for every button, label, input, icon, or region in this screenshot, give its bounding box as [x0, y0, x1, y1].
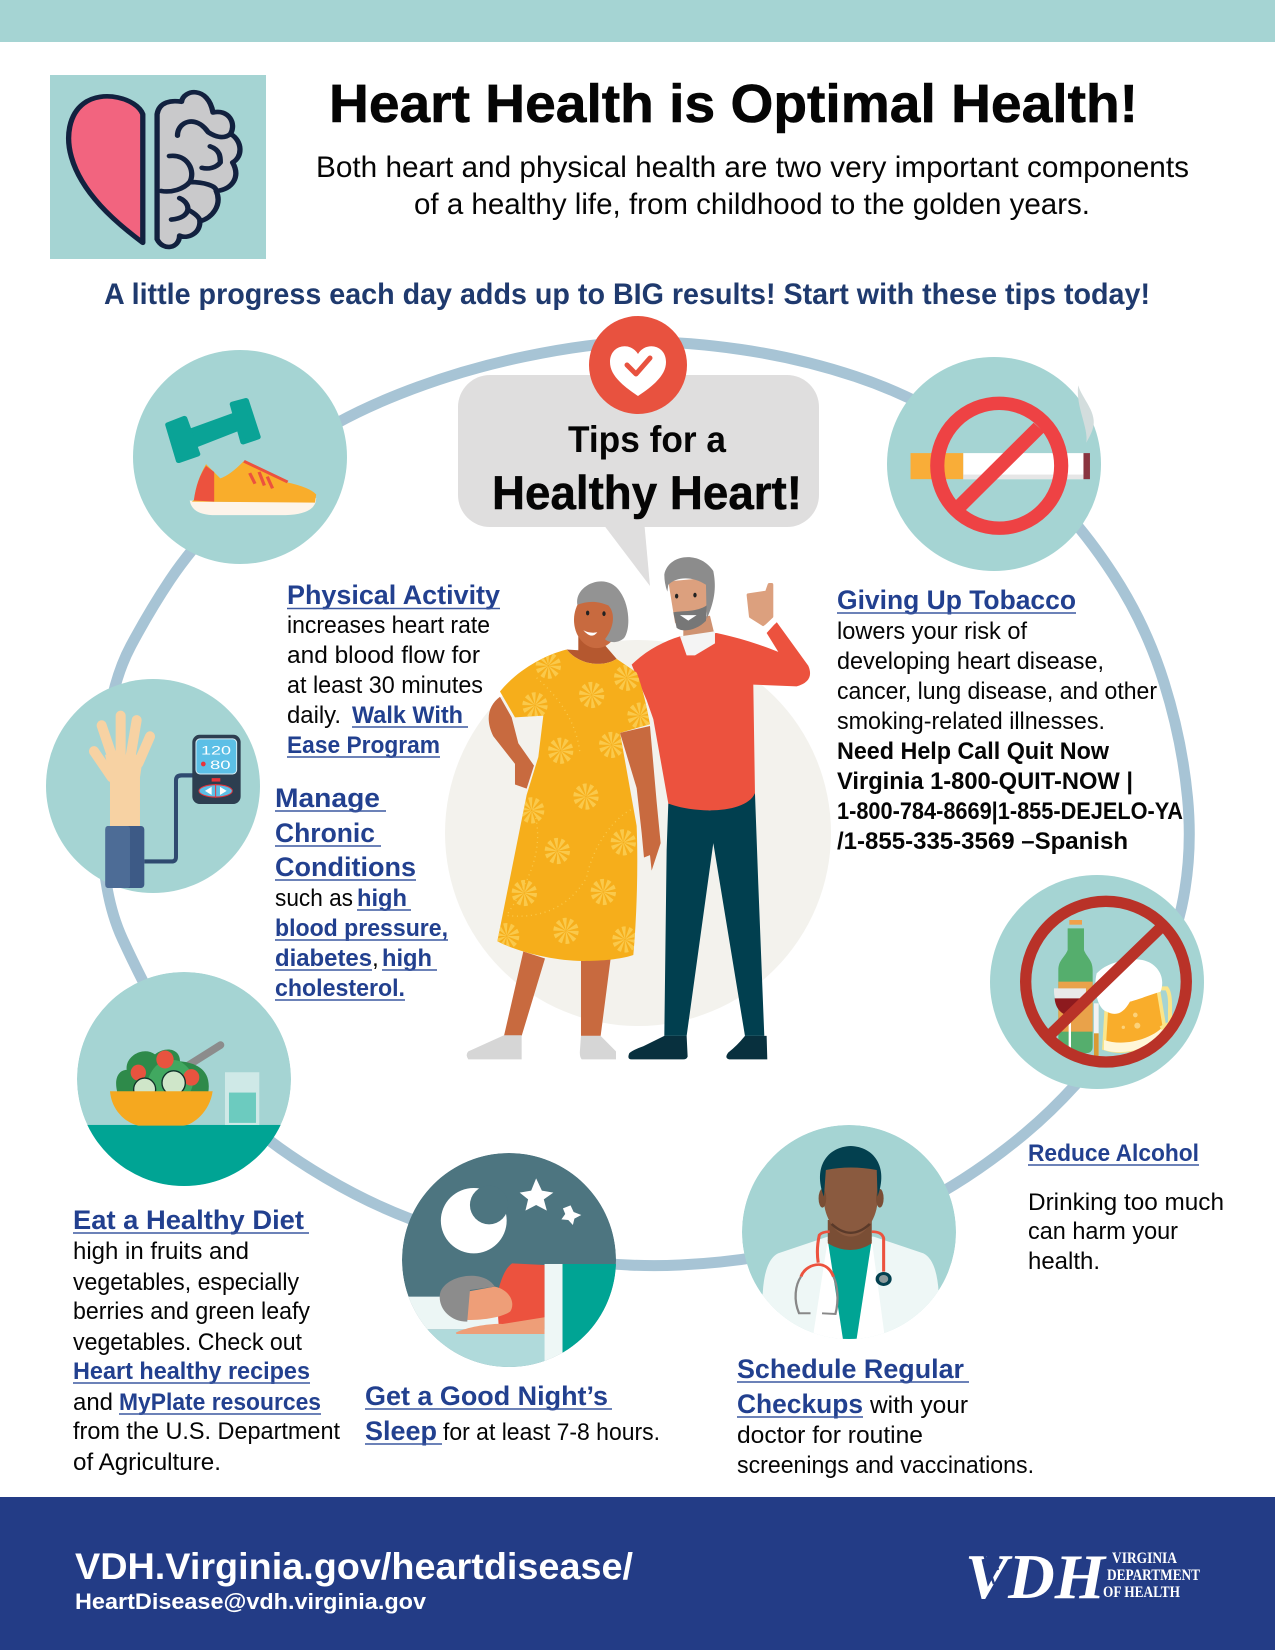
- healthy diet tip: from the U.S. Department: [73, 1418, 340, 1445]
- giving up tobacco tip: Giving Up Tobacco: [837, 585, 1076, 615]
- icon: doctor: [742, 1125, 962, 1353]
- schedule regular checkups tip: [737, 1354, 1034, 1479]
- giving up tobacco tip: smoking-related illnesses.: [837, 708, 1105, 735]
- healthy diet tip: MyPlate resources: [119, 1389, 321, 1416]
- good night's sleep tip: Sleep: [365, 1416, 437, 1446]
- manage chronic conditions tip: cholesterol.: [275, 975, 405, 1002]
- schedule regular checkups tip: Schedule Regular: [737, 1354, 964, 1384]
- manage chronic conditions tip: such as: [275, 885, 353, 912]
- physical activity tip: daily.: [287, 702, 341, 729]
- manage chronic conditions tip: high: [357, 885, 407, 912]
- icon: blood pressure monitor: [46, 679, 260, 893]
- icon: heart badge: [589, 316, 687, 414]
- healthy diet tip: and: [73, 1389, 113, 1416]
- logo: VDH: DEPARTMENT: [1107, 1567, 1201, 1584]
- manage chronic conditions tip: high: [382, 945, 432, 972]
- giving up tobacco tip: /1-855-335-3569 –Spanish: [837, 828, 1128, 855]
- manage chronic conditions tip: Manage: [275, 783, 380, 813]
- good night's sleep tip: for at least 7-8 hours.: [443, 1419, 660, 1446]
- manage chronic conditions tip: [275, 783, 448, 1002]
- healthy diet tip: Heart healthy recipes: [73, 1358, 310, 1385]
- giving up tobacco tip: [837, 585, 1183, 855]
- icon: no smoking: [887, 357, 1101, 571]
- giving up tobacco tip: cancer, lung disease, and other: [837, 678, 1157, 705]
- icon: heart and brain: [50, 75, 266, 259]
- giving up tobacco tip: Need Help Call Quit Now: [837, 738, 1109, 765]
- manage chronic conditions tip: Conditions: [275, 852, 416, 882]
- man: [628, 557, 810, 1059]
- physical activity tip: and blood flow for: [287, 642, 480, 669]
- logo: VDH: [965, 1541, 1201, 1612]
- schedule regular checkups tip: doctor for routine: [737, 1422, 923, 1449]
- physical activity tip: at least 30 minutes: [287, 672, 483, 699]
- bubble heading: Tips for a: [568, 419, 726, 460]
- healthy diet tip: berries and green leafy: [73, 1298, 311, 1325]
- illustration: older couple: [467, 557, 810, 1059]
- bubble heading: Healthy Heart!: [492, 466, 802, 519]
- bubble heading: [492, 419, 802, 519]
- icon: no alcohol: [990, 875, 1204, 1089]
- schedule regular checkups tip: with your: [869, 1392, 968, 1419]
- woman: [467, 581, 661, 1059]
- top band: [0, 0, 1275, 42]
- speech bubble: [458, 375, 819, 586]
- good night's sleep tip: Get a Good Night’s: [365, 1381, 608, 1411]
- schedule regular checkups tip: screenings and vaccinations.: [737, 1452, 1034, 1479]
- icon: dumbbell and sneaker: [133, 350, 347, 564]
- manage chronic conditions tip: diabetes: [275, 945, 372, 972]
- reduce alcohol tip: can harm your: [1028, 1218, 1178, 1245]
- manage chronic conditions tip: blood pressure,: [275, 915, 448, 942]
- title: Heart Health is Optimal Health!: [329, 74, 1138, 134]
- physical activity tip: Ease Program: [287, 732, 440, 759]
- healthy diet tip: vegetables, especially: [73, 1269, 300, 1296]
- reduce alcohol tip: [1028, 1140, 1224, 1275]
- giving up tobacco tip: 1-800-784-8669|1-855-DEJELO-YA: [837, 798, 1183, 825]
- logo: VDH: OF HEALTH: [1103, 1584, 1180, 1601]
- backdrop circle behind people: [445, 640, 831, 1026]
- reduce alcohol tip: health.: [1028, 1248, 1100, 1275]
- healthy diet tip: of Agriculture.: [73, 1449, 221, 1476]
- intro text: [316, 151, 1189, 221]
- footer band: VDH.Virginia.gov/heartdisease/: [75, 1546, 633, 1587]
- icon: blood pressure monitor: 80: [210, 758, 231, 772]
- giving up tobacco tip: Virginia 1-800-QUIT-NOW |: [837, 768, 1133, 795]
- icon: sleeping person: [395, 1153, 624, 1374]
- icon: blood pressure monitor: 120: [201, 744, 231, 758]
- healthy diet tip: vegetables. Check out: [73, 1329, 302, 1356]
- schedule regular checkups tip: Checkups: [737, 1389, 863, 1419]
- giving up tobacco tip: lowers your risk of: [837, 618, 1027, 645]
- reduce alcohol tip: Drinking too much: [1028, 1189, 1224, 1216]
- manage chronic conditions tip: Chronic: [275, 818, 375, 848]
- footer band: HeartDisease@vdh.virginia.gov: [75, 1589, 427, 1614]
- physical activity tip: Physical Activity: [287, 580, 500, 610]
- healthy diet tip: Eat a Healthy Diet: [73, 1205, 304, 1235]
- physical activity tip: [287, 580, 500, 759]
- logo: VDH: VIRGINIA: [1112, 1550, 1178, 1567]
- reduce alcohol tip: Reduce Alcohol: [1028, 1140, 1199, 1167]
- ring connecting tips: [102, 342, 1189, 1266]
- intro text: Both heart and physical health are two very important components: [316, 151, 1189, 184]
- giving up tobacco tip: developing heart disease,: [837, 648, 1104, 675]
- physical activity tip: increases heart rate: [287, 612, 490, 639]
- tagline: A little progress each day adds up to BIG results! Start with these tips today!: [104, 278, 1150, 311]
- manage chronic conditions tip: ,: [372, 945, 379, 972]
- physical activity tip: Walk With: [352, 702, 463, 729]
- intro text: of a healthy life, from childhood to the golden years.: [414, 188, 1090, 221]
- healthy diet tip: [73, 1205, 340, 1476]
- logo: VDH: VDH: [965, 1541, 1107, 1612]
- healthy diet tip: high in fruits and: [73, 1238, 249, 1265]
- icon: salad and water: [77, 972, 291, 1186]
- footer band: [0, 1497, 1275, 1650]
- good night's sleep tip: [365, 1381, 660, 1446]
